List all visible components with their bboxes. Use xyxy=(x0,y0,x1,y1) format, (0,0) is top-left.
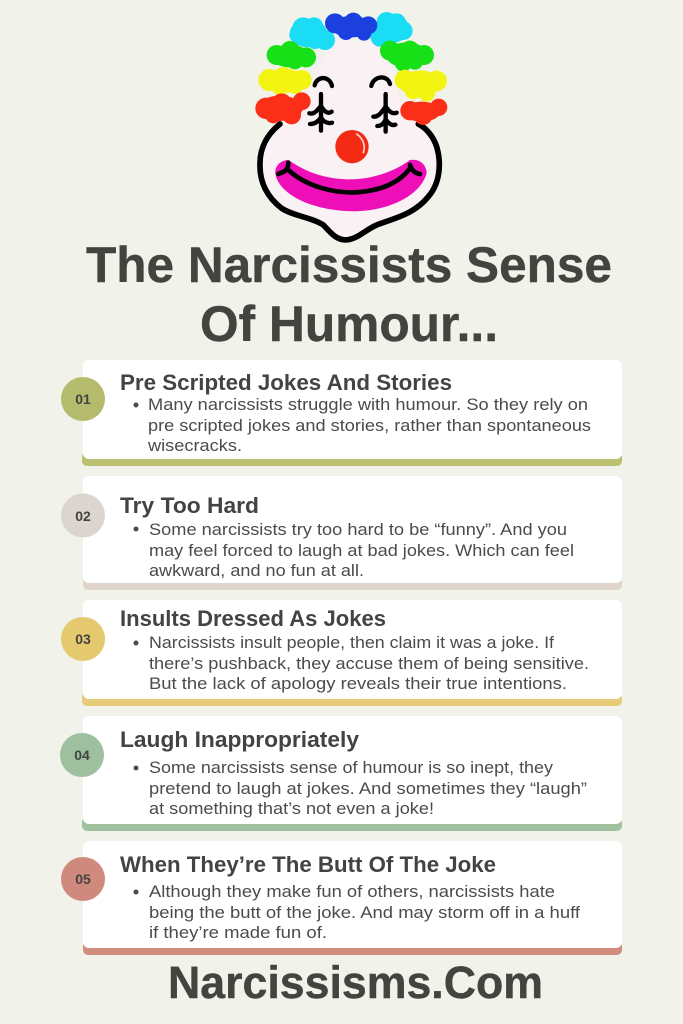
panel: laugh inappropriately xyxy=(60,716,622,831)
icon: smiling mouth xyxy=(275,160,427,211)
panel: laugh inappropriately: 04 xyxy=(74,747,90,763)
icon: clown face xyxy=(255,12,447,240)
title xyxy=(86,237,612,352)
panel: insults dressed as jokes: But the lack of apology reveals their true intentions. xyxy=(149,675,567,693)
panel: butt of the joke xyxy=(61,841,622,955)
panel: butt of the joke: When They’re The Butt Of The Joke xyxy=(120,852,496,877)
panel: try too hard xyxy=(61,476,622,590)
panel: laugh inappropriately: Some narcissists sense of humour is so inept, they xyxy=(149,759,554,777)
panel: pre scripted jokes: 01 xyxy=(75,391,91,407)
panel: pre scripted jokes: Pre Scripted Jokes And Stories xyxy=(120,370,452,395)
panel: pre scripted jokes: wisecracks. xyxy=(147,437,242,455)
panel: butt of the joke: if they’re made fun of. xyxy=(149,924,327,942)
icon: rainbow hair xyxy=(255,12,447,125)
panel: insults dressed as jokes: Narcissists insult people, then claim it was a joke. If xyxy=(149,634,554,652)
panel: insults dressed as jokes: 03 xyxy=(75,631,91,647)
panel: laugh inappropriately: at something that’s not even a joke! xyxy=(149,800,434,818)
panel: laugh inappropriately: pretend to laugh at jokes. And sometimes they “laugh” xyxy=(149,780,587,798)
panel: try too hard: awkward, and no fun at all. xyxy=(149,562,364,580)
panel: try too hard: Try Too Hard xyxy=(120,493,259,518)
panel: butt of the joke: Although they make fun of others, narcissists hate xyxy=(149,883,555,901)
panel: try too hard: Some narcissists try too hard to be “funny”. And you xyxy=(149,521,567,539)
footer: site name: Narcissisms.Com xyxy=(168,957,543,1008)
panel: pre scripted jokes: Many narcissists struggle with humour. So they rely on xyxy=(148,396,588,414)
panel: insults dressed as jokes xyxy=(61,600,622,706)
panel: try too hard: 02 xyxy=(75,508,91,524)
panel: insults dressed as jokes: there’s pushback, they accuse them of being sensitive. xyxy=(149,655,589,673)
icon: eyes xyxy=(309,77,397,132)
icon: red nose xyxy=(335,130,369,163)
panel: laugh inappropriately: Laugh Inappropriately xyxy=(120,727,360,752)
title: Of Humour... xyxy=(200,296,498,352)
panel: butt of the joke: 05 xyxy=(75,871,91,887)
panel: butt of the joke: being the butt of the joke. And may storm off in a huff xyxy=(149,904,580,922)
panel: pre scripted jokes: pre scripted jokes and stories, rather than spontaneous xyxy=(148,417,591,435)
title: The Narcissists Sense xyxy=(86,237,612,293)
panel: insults dressed as jokes: Insults Dressed As Jokes xyxy=(120,606,386,631)
panel: try too hard: may feel forced to laugh at bad jokes. Which can feel xyxy=(149,542,574,560)
panel: pre scripted jokes xyxy=(61,360,622,466)
